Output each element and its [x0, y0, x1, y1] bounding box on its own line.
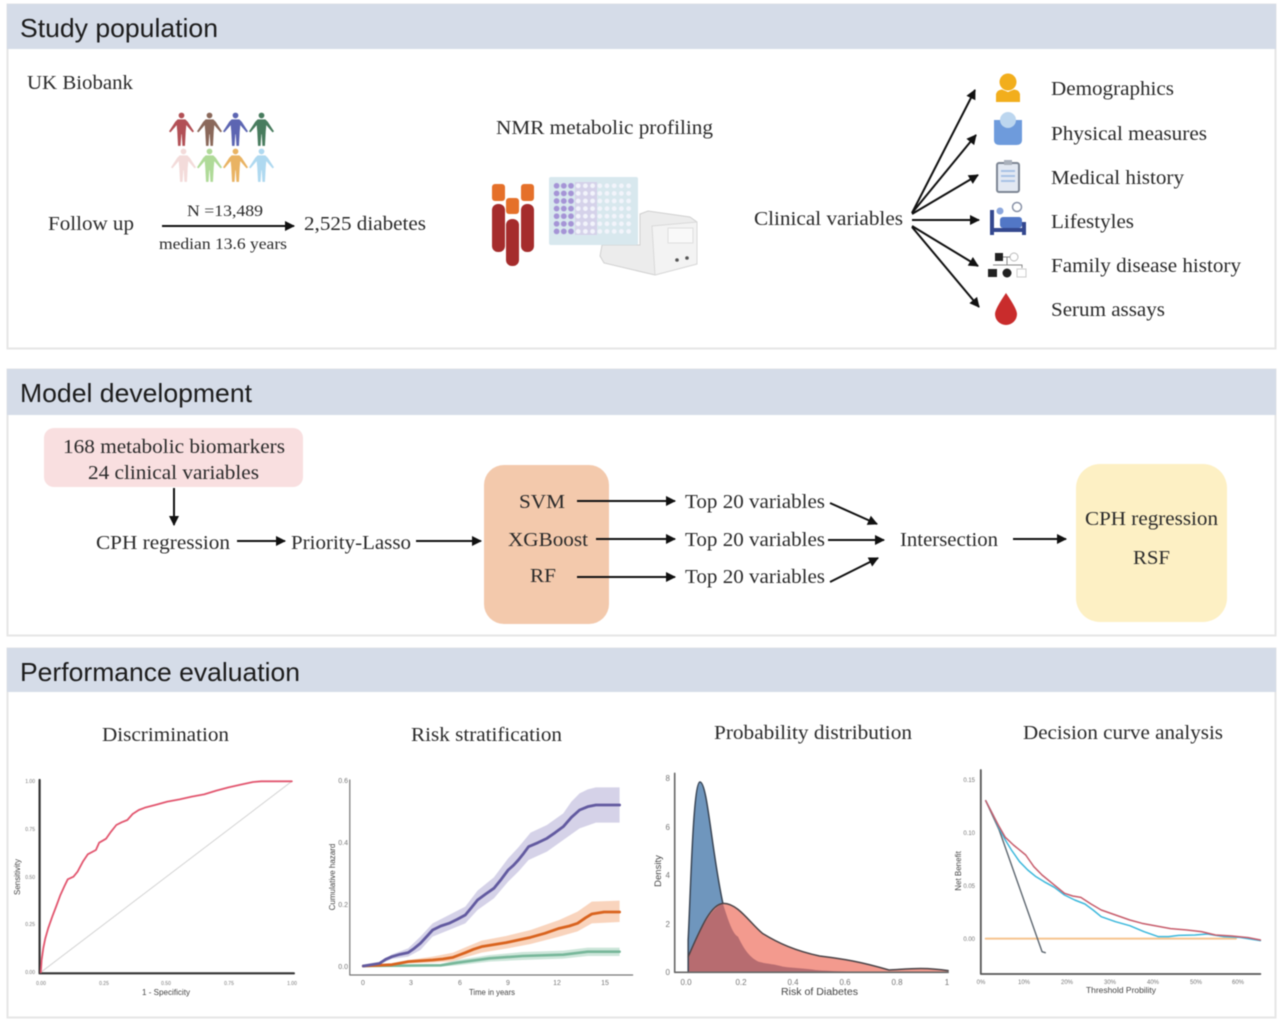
chart: decision curve analysis: 30% — [1104, 980, 1117, 986]
chart: probability distribution density: 0.8 — [891, 978, 903, 987]
chart: probability distribution density: 0 — [666, 968, 671, 977]
box: final models: RSF — [1133, 547, 1170, 569]
text: intersection: Intersection — [900, 529, 998, 551]
heading: study population — [7, 4, 1276, 49]
text: serum assays: Serum assays — [1051, 299, 1165, 321]
text: physical measures: Physical measures — [1051, 123, 1207, 145]
chart: risk stratification cumulative hazard — [328, 724, 633, 997]
chart: ROC discrimination: 0.00 — [25, 970, 35, 976]
text: CPH regression: CPH regression — [96, 532, 230, 554]
chart: risk stratification cumulative hazard: 0.2 — [338, 902, 348, 909]
chart: ROC discrimination: 1.00 — [287, 981, 297, 987]
text: decision curve analysis title: Decision curve analysis — [1023, 722, 1223, 744]
text: follow up: Follow up — [48, 213, 134, 235]
chart: probability distribution density: 1 — [945, 978, 950, 987]
chart: ROC discrimination: 1 - Specificity — [142, 988, 190, 997]
chart: risk stratification cumulative hazard: 9 — [506, 980, 510, 987]
arrows: top variables to intersection — [828, 503, 884, 582]
icon: physical measures scale — [994, 112, 1022, 145]
text: discrimination title: Discrimination — [102, 724, 229, 746]
icon: medical history clipboard — [997, 160, 1019, 192]
text: top 20 variables: Top 20 variables — [685, 491, 825, 513]
chart: risk stratification cumulative hazard: 0.0 — [338, 964, 348, 971]
panel: performance evaluation — [7, 648, 1276, 1018]
heading: performance evaluation — [7, 648, 1276, 692]
chart: ROC discrimination: 1.00 — [25, 779, 35, 785]
chart: ROC discrimination: 0.50 — [161, 981, 171, 987]
chart: risk stratification cumulative hazard: 0.4 — [338, 840, 348, 847]
chart: probability distribution density: 0.4 — [787, 978, 799, 987]
box: final models — [1076, 464, 1227, 622]
panel: study population — [7, 4, 1276, 348]
text: N =13,489: N =13,489 — [187, 203, 263, 220]
text: top 20 variables — [685, 491, 825, 588]
arrows: clinical variable categories — [912, 90, 979, 307]
arrow: intersection to final models — [1013, 538, 1066, 540]
panel: model development — [7, 369, 1276, 636]
heading: performance evaluation: Performance evaluation — [20, 657, 300, 687]
text: median follow up: median 13.6 years — [159, 236, 287, 253]
chart: ROC discrimination: 0.25 — [25, 922, 35, 928]
box: machine learning models: SVM — [519, 491, 565, 513]
arrow: Priority-Lasso to models — [416, 540, 481, 542]
chart: decision curve analysis: 0% — [977, 980, 986, 986]
chart: ROC discrimination: Sensitivity — [13, 859, 22, 895]
box: machine learning models: RF — [530, 565, 556, 587]
chart: risk stratification cumulative hazard: Cumulative hazard — [328, 844, 337, 910]
icon: lifestyles bed — [990, 202, 1026, 235]
text: family disease history: Family disease history — [1051, 255, 1241, 277]
chart: probability distribution density: 6 — [666, 823, 671, 832]
chart: probability distribution density: 0.2 — [735, 978, 747, 987]
chart: risk stratification cumulative hazard: 15 — [601, 980, 609, 987]
icon: demographics — [996, 74, 1020, 102]
chart: ROC discrimination: 0.75 — [25, 827, 35, 833]
box: input variables: 168 metabolic biomarkers — [63, 436, 285, 458]
chart: risk stratification cumulative hazard: 3 — [409, 980, 413, 987]
heading: study population: Study population — [20, 13, 218, 43]
arrow: CPH to Priority-Lasso — [237, 540, 285, 542]
chart: risk stratification cumulative hazard: 12 — [553, 980, 561, 987]
box: machine learning models — [484, 465, 609, 624]
icon: blood tubes — [492, 184, 534, 266]
chart: risk stratification cumulative hazard: 0.6 — [338, 778, 348, 785]
chart: risk stratification cumulative hazard: 0 — [361, 980, 365, 987]
chart: risk stratification cumulative hazard: Time in years — [469, 987, 515, 997]
text: probability distribution title: Probability distribution — [714, 722, 912, 744]
text: 2,525 diabetes: 2,525 diabetes — [304, 213, 426, 235]
text: medical history: Medical history — [1051, 167, 1184, 189]
text: lifestyles: Lifestyles — [1051, 211, 1134, 233]
chart: decision curve analysis: 50% — [1190, 980, 1203, 986]
text: demographics: Demographics — [1051, 78, 1174, 100]
arrows: models to top variables — [577, 501, 675, 577]
text: Priority-Lasso: Priority-Lasso — [291, 532, 411, 554]
chart: probability distribution density: 0.6 — [839, 978, 851, 987]
chart: decision curve analysis: Threshold Probility — [1086, 986, 1156, 995]
chart: ROC discrimination: 0.50 — [25, 875, 35, 881]
text: NMR metabolic profiling: NMR metabolic profiling — [496, 117, 713, 139]
chart: decision curve analysis: 0.05 — [963, 884, 976, 890]
chart: decision curve analysis: Net Benefit — [954, 850, 963, 891]
text: top 20 variables: Top 20 variables — [685, 566, 825, 588]
chart: probability distribution density: Density — [653, 855, 664, 887]
chart: ROC discrimination — [13, 724, 297, 997]
chart: decision curve analysis — [954, 722, 1260, 995]
chart: probability distribution density — [653, 722, 950, 998]
icon: well plate — [549, 177, 638, 245]
arrow: inputs to CPH — [173, 488, 175, 525]
arrow: follow up to diabetes — [162, 225, 294, 227]
text: UK Biobank: UK Biobank — [27, 72, 133, 94]
box: final models: CPH regression — [1085, 508, 1218, 530]
chart: risk stratification cumulative hazard: 6 — [458, 980, 462, 987]
chart: decision curve analysis: 0.15 — [963, 778, 976, 784]
text: top 20 variables: Top 20 variables — [685, 529, 825, 551]
icon: serum blood drop — [995, 293, 1017, 325]
heading: model development: Model development — [20, 378, 253, 408]
chart: decision curve analysis: 10% — [1018, 980, 1031, 986]
chart: probability distribution density: Risk of Diabetes — [781, 987, 858, 998]
text: clinical variables: Clinical variables — [754, 208, 903, 230]
chart: decision curve analysis: 0.00 — [963, 937, 976, 943]
icon: population figures — [169, 113, 274, 182]
chart: decision curve analysis: 20% — [1061, 980, 1074, 986]
chart: probability distribution density: 8 — [666, 774, 671, 783]
chart: ROC discrimination: 0.25 — [99, 981, 109, 987]
chart: probability distribution density: 2 — [666, 920, 671, 929]
text: risk stratification title: Risk stratification — [411, 724, 562, 746]
chart: decision curve analysis: 60% — [1232, 980, 1245, 986]
chart: ROC discrimination: 0.00 — [36, 981, 46, 987]
chart: decision curve analysis: 0.10 — [963, 831, 976, 837]
chart: probability distribution density: 4 — [666, 871, 671, 880]
icon: family pedigree — [988, 253, 1026, 278]
box: input variables — [44, 428, 303, 487]
heading: model development — [7, 369, 1276, 415]
icon: NMR machine — [600, 211, 697, 275]
box: input variables: 24 clinical variables — [88, 462, 259, 484]
chart: probability distribution density: 0.0 — [680, 978, 692, 987]
chart: ROC discrimination: 0.75 — [224, 981, 234, 987]
chart: decision curve analysis: 40% — [1147, 980, 1160, 986]
box: machine learning models: XGBoost — [508, 529, 588, 551]
